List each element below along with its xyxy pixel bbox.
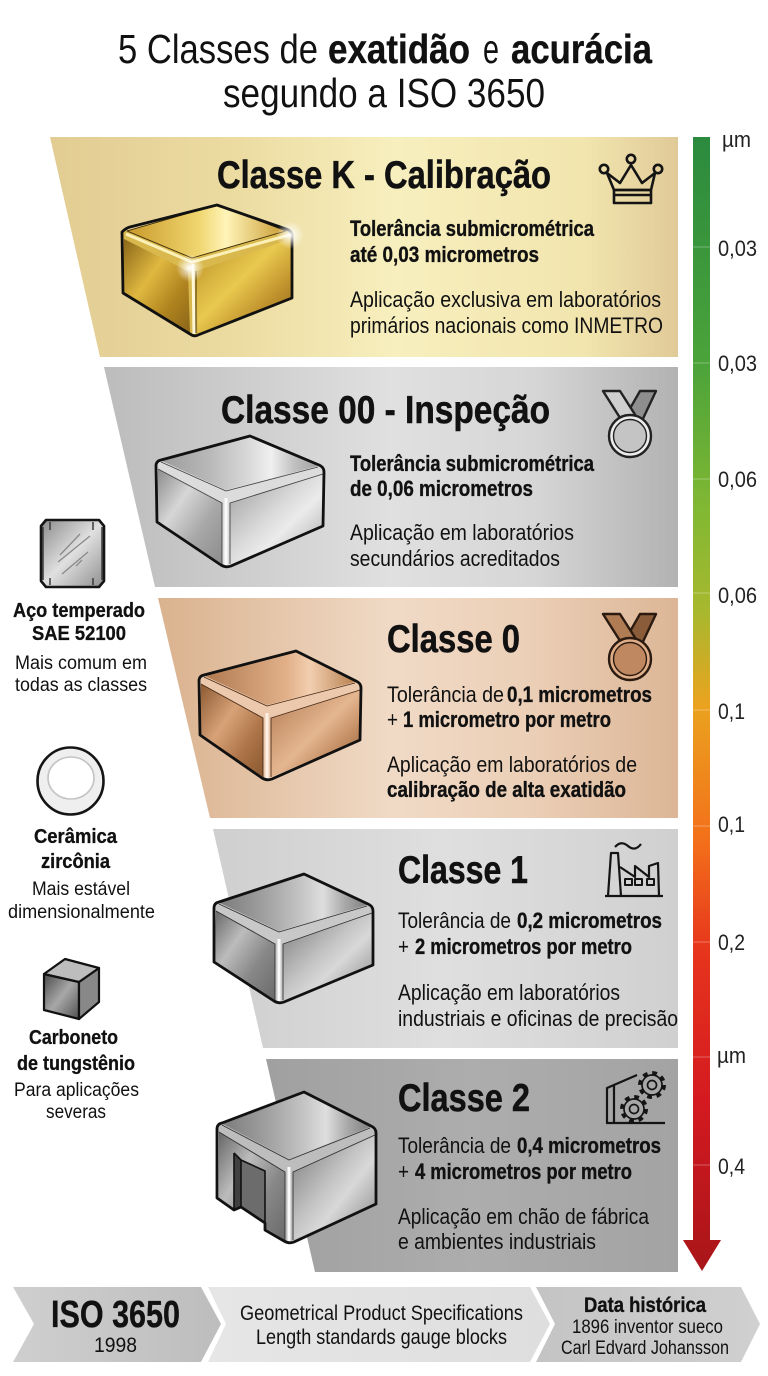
application text: Aplicação em laboratórios xyxy=(398,980,620,1005)
gauge scale labels xyxy=(717,127,757,1179)
application text: Aplicação exclusiva em laboratórios xyxy=(350,287,661,312)
tolerance text: + xyxy=(398,1159,409,1184)
icon: bronze medal xyxy=(603,614,656,680)
gauge scale labels: 0,06 xyxy=(718,583,757,608)
chevron: ISO 3650: 1998 xyxy=(94,1334,137,1357)
icon: dark cube xyxy=(44,959,99,1019)
steel gauge block xyxy=(214,874,373,1003)
tolerance text: Tolerância submicrométrica xyxy=(350,451,595,476)
tolerance text: 0,4 micrometros xyxy=(517,1133,661,1158)
heading: Classe 1: Classe 1 xyxy=(398,849,528,892)
gauge scale labels: 0,03 xyxy=(718,236,757,261)
gauge scale labels: µm xyxy=(717,1043,746,1068)
tolerance text xyxy=(398,1133,661,1184)
title: segundo a ISO 3650 xyxy=(223,70,545,116)
icon: steel block xyxy=(41,520,104,587)
tolerance text: 1 micrometro por metro xyxy=(403,707,611,732)
icon: crown xyxy=(600,155,662,203)
material: carboneto de tungstênio: de tungstênio xyxy=(17,1053,135,1075)
title: 5 Classes de xyxy=(118,26,318,72)
material: carboneto de tungstênio: Para aplicações xyxy=(14,1080,139,1101)
material: aço temperado: todas as classes xyxy=(15,675,147,696)
tolerance text: Tolerância de xyxy=(398,908,511,933)
application text: e ambientes industriais xyxy=(398,1229,596,1254)
gauge scale labels: 0,1 xyxy=(718,812,745,837)
application text: Aplicação em laboratórios de xyxy=(387,752,637,777)
chevron: data histórica: 1896 inventor sueco xyxy=(572,1317,723,1338)
accuracy gauge arrow xyxy=(683,137,721,1271)
tolerance text xyxy=(387,682,652,732)
notched gauge block xyxy=(217,1092,376,1243)
chevron: specifications: Geometrical Product Specifications xyxy=(240,1302,523,1325)
tolerance text: 2 micrometros por metro xyxy=(415,934,632,959)
icon: silver medal xyxy=(603,391,656,457)
chevron: data histórica: Data histórica xyxy=(584,1294,706,1317)
material: cerâmica zircônia: Mais estável xyxy=(32,879,130,900)
panel: Classe 2 xyxy=(217,1059,678,1272)
chevron: data histórica: Carl Edvard Johansson xyxy=(561,1338,729,1359)
gauge scale labels: µm xyxy=(722,127,751,152)
heading: Classe 0: Classe 0 xyxy=(387,618,520,661)
material: cerâmica zircônia xyxy=(8,748,155,923)
application text: Aplicação em laboratórios xyxy=(350,520,574,545)
chevron: data histórica xyxy=(536,1287,760,1362)
application text xyxy=(350,287,663,338)
title: acurácia xyxy=(511,26,653,72)
icon: ceramic ring xyxy=(38,748,104,814)
tolerance text: 4 micrometros por metro xyxy=(415,1159,632,1184)
application text: calibração de alta exatidão xyxy=(387,777,626,802)
heading: Classe 2: Classe 2 xyxy=(398,1077,530,1120)
chevron: specifications: Length standards gauge blocks xyxy=(256,1326,507,1349)
title xyxy=(118,26,653,116)
icon: gears xyxy=(606,1073,665,1123)
tolerance text xyxy=(350,451,595,501)
material: carboneto de tungstênio: Carboneto xyxy=(29,1027,118,1049)
material: cerâmica zircônia: dimensionalmente xyxy=(8,902,155,923)
silver gauge block xyxy=(156,436,324,567)
title: e xyxy=(483,26,499,72)
tolerance text xyxy=(350,216,595,267)
application text xyxy=(398,1204,650,1254)
gauge scale labels: 0,06 xyxy=(718,467,757,492)
chevron: ISO 3650 xyxy=(13,1287,221,1362)
material: cerâmica zircônia: Cerâmica xyxy=(34,826,118,848)
chevron: specifications xyxy=(208,1287,550,1362)
material: aço temperado: Aço temperado xyxy=(13,600,145,622)
panel: Classe 0 xyxy=(158,598,678,818)
tolerance text: Tolerância de xyxy=(398,1133,511,1158)
tolerance text: Tolerância submicrométrica xyxy=(350,216,595,241)
gauge scale labels: 0,1 xyxy=(718,699,745,724)
icon: factory xyxy=(605,843,663,896)
material: aço temperado: Mais comum em xyxy=(15,653,147,674)
application text xyxy=(350,520,574,571)
gauge scale labels: 0,2 xyxy=(718,930,745,955)
panel: Classe K xyxy=(50,137,678,357)
application text xyxy=(398,980,678,1031)
tolerance text: Tolerância de xyxy=(387,682,504,707)
material: aço temperado: SAE 52100 xyxy=(32,623,126,645)
tolerance text xyxy=(398,908,662,959)
gauge scale labels: 0,03 xyxy=(718,351,757,376)
panel: Classe 1 xyxy=(213,829,678,1048)
tolerance text: 0,2 micrometros xyxy=(517,908,662,933)
material: aço temperado xyxy=(13,520,147,696)
tolerance text: 0,1 micrometros xyxy=(507,682,652,707)
tolerance text: + xyxy=(387,707,398,732)
gold gauge block xyxy=(122,205,304,336)
title: exatidão xyxy=(328,26,470,72)
heading: Classe K: Classe K - Calibração xyxy=(217,154,551,197)
panel: Classe 00 xyxy=(104,367,678,587)
material: carboneto de tungstênio: severas xyxy=(46,1102,106,1123)
application text xyxy=(387,752,637,802)
material: carboneto de tungstênio xyxy=(14,959,139,1123)
application text: Aplicação em chão de fábrica xyxy=(398,1204,650,1229)
application text: industriais e oficinas de precisão xyxy=(398,1006,678,1031)
bronze gauge block xyxy=(199,651,361,780)
application text: primários nacionais como INMETRO xyxy=(350,313,663,338)
material: cerâmica zircônia: zircônia xyxy=(41,851,111,873)
chevron: ISO 3650: ISO 3650 xyxy=(51,1294,180,1336)
application text: secundários acreditados xyxy=(350,546,560,571)
tolerance text: de 0,06 micrometros xyxy=(350,476,533,501)
tolerance text: até 0,03 micrometros xyxy=(350,242,539,267)
tolerance text: + xyxy=(398,934,409,959)
heading: Classe 00: Classe 00 - Inspeção xyxy=(221,389,550,432)
gauge scale labels: 0,4 xyxy=(718,1154,745,1179)
